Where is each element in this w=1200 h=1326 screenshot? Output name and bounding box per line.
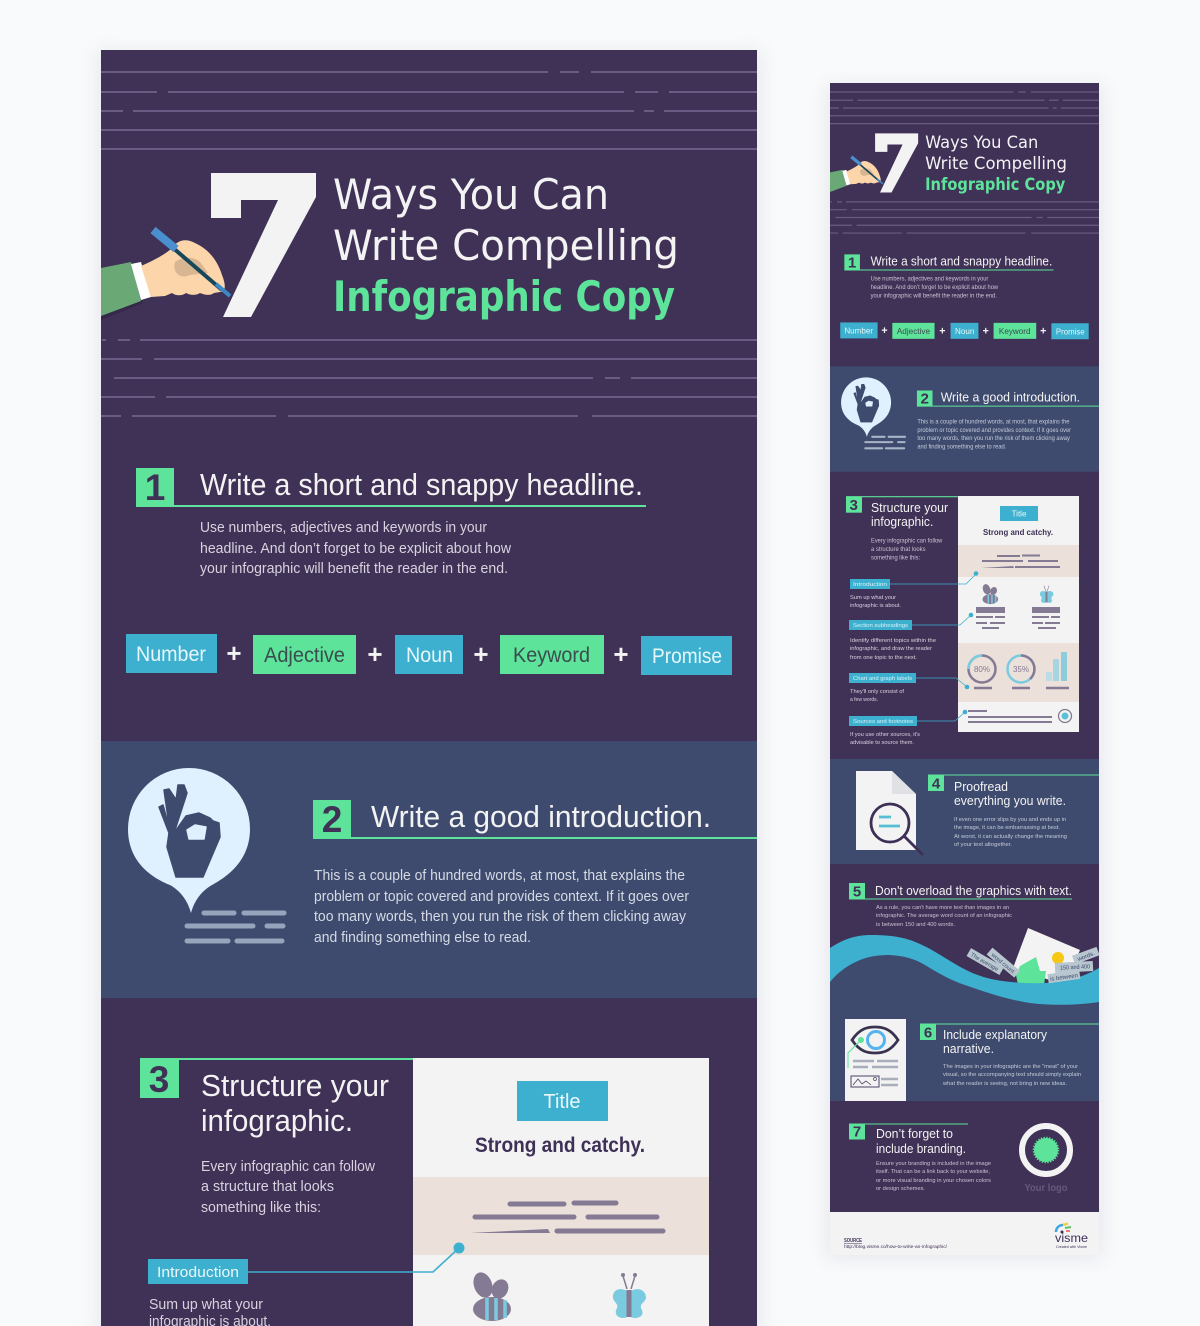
thumbnail panel: section 4 proofread: At worst, it can actually change the meaning <box>954 834 1067 840</box>
thumbnail panel: section 6: visual, so the accompanying text should simply explain <box>943 1072 1081 1078</box>
thumbnail callouts: Section subheadings <box>853 623 908 629</box>
section 2 text: problem or topic covered and provides context. If it goes over <box>314 888 689 905</box>
headline formula <box>126 634 732 675</box>
thumbnail panel: section 6: what the reader is seeing, not bring in new ideas. <box>942 1081 1067 1087</box>
thumbnail panel: section 6: 6 <box>924 1024 932 1042</box>
section 3 heading: 3 <box>149 1059 169 1100</box>
section 3 heading <box>140 1059 413 1138</box>
thumbnail section 3 heading: something like this: <box>871 554 920 561</box>
thumbnail section 2: 2 <box>920 391 929 408</box>
thumbnail section 5 heading: 5 <box>853 884 861 900</box>
thumbnail callouts: infographic is about. <box>850 603 901 609</box>
thumbnail formula: + <box>1040 325 1046 337</box>
section 1 text: your infographic will benefit the reader in the end. <box>200 560 508 577</box>
section 3 heading: infographic. <box>201 1103 353 1138</box>
thumbnail callouts: If you use other sources, it's <box>850 732 920 738</box>
thumbnail callouts: Introduction <box>853 582 887 588</box>
thumbnail icon: hand <box>830 157 883 192</box>
introduction description: Sum up what your <box>149 1296 263 1313</box>
thumbnail section 2: Write a good introduction. <box>941 390 1080 405</box>
thumbnail callouts: They'll only consist of <box>850 689 904 695</box>
thumbnail callouts: a few words. <box>850 697 878 703</box>
thumbnail section 2: problem or topic covered and provides context. If it goes over <box>917 427 1071 434</box>
thumbnail formula: Keyword <box>999 326 1031 336</box>
thumbnail callouts: infographic, and draw the reader <box>850 646 932 652</box>
section 2 heading: 2 <box>322 799 342 840</box>
thumbnail panel: section 7: or more visual branding in your chosen colors <box>876 1178 991 1184</box>
thumbnail panel: section 7: Don’t forget to <box>876 1127 953 1141</box>
headline formula: Noun <box>406 644 453 667</box>
thumbnail formula: Noun <box>955 326 975 336</box>
icon: eye card <box>845 1019 906 1101</box>
source: SOURCE <box>844 1238 863 1244</box>
thumbnail callouts: from one topic to the next. <box>850 655 917 661</box>
thumbnail panel: section 4 proofread: 4 <box>932 776 941 792</box>
thumbnail icons: bee and butterfly <box>981 583 1053 604</box>
thumbnail formula: Adjective <box>897 326 930 336</box>
headline formula: Number <box>136 643 206 666</box>
thumbnail formula: + <box>983 325 989 337</box>
thumbnail callouts <box>849 571 978 746</box>
section 2 heading: Write a good introduction. <box>371 799 711 834</box>
thumbnail section 1: Use numbers, adjectives and keywords in your <box>871 276 988 283</box>
callout: introduction <box>148 1242 464 1284</box>
thumbnail callouts: Sources and footnotes <box>853 719 913 725</box>
thumbnail title: Write Compelling <box>925 154 1067 174</box>
section 2 text: This is a couple of hundred words, at most, that explains the <box>314 867 685 884</box>
thumbnail panel: section 7 <box>830 1101 1099 1212</box>
thumbnail panel: section 6: narrative. <box>943 1042 994 1056</box>
introduction description <box>149 1296 271 1326</box>
thumbnail section 2 <box>830 366 1099 472</box>
thumbnail callouts: Chart and graph labels <box>853 676 912 682</box>
icon: OK hand speech bubble <box>128 768 284 941</box>
thumbnail panel: section 7: Ensure your branding is included in the image <box>876 1161 991 1167</box>
callout: introduction: Introduction <box>157 1264 239 1281</box>
thumbnail section 3 heading: infographic. <box>871 514 933 529</box>
panel: full infographic thumbnail <box>830 83 1100 1255</box>
headline formula: + <box>613 639 629 669</box>
thumbnail: top half scaled <box>830 92 1099 561</box>
thumbnail panel: section 7: 7 <box>853 1124 861 1140</box>
thumbnail chart: 35% donut: 35% <box>1013 665 1029 674</box>
thumbnail panel: section 4 proofread: everything you write. <box>954 794 1066 808</box>
thumbnail chart: 35% donut <box>1008 656 1034 682</box>
icon: bee <box>470 1270 511 1321</box>
illustration: image and words sliding into wave: word count <box>989 952 1015 975</box>
section 3 text: something like this: <box>201 1199 321 1216</box>
thumbnail chart: 80% donut <box>968 656 996 682</box>
thumbnail section 2: This is a couple of hundred words, at most, that explains the <box>917 418 1070 425</box>
thumbnail formula <box>840 322 1089 339</box>
panel: infographic structure mockup <box>413 1058 709 1326</box>
thumbnail section 3 heading: Structure your <box>871 500 949 515</box>
thumbnail panel: section 4 proofread: of your text altogether. <box>954 842 1012 848</box>
thumbnail panel: section 4 proofread <box>830 759 1099 864</box>
section 3 text: Every infographic can follow <box>201 1158 375 1175</box>
thumbnail footer logo ring <box>1058 710 1072 722</box>
illustration: image and words sliding into wave: words. <box>1076 951 1096 963</box>
thumbnail section 5 heading: As a rule, you can't have more text than images in an <box>876 905 1009 911</box>
panel: large infographic preview <box>101 50 757 1326</box>
visme logo: Created with Visme <box>1056 1245 1087 1249</box>
section 1 text <box>200 519 511 577</box>
thumbnail section 2: and finding something else to read. <box>917 444 1007 451</box>
thumbnail section 5 heading: infographic. The average word count of an infographic <box>876 913 1012 919</box>
icon: your logo: Your logo <box>1024 1182 1068 1194</box>
headline formula: + <box>367 639 383 669</box>
thumbnail structure mockup: Title <box>1012 510 1027 518</box>
thumbnail formula: + <box>881 325 888 337</box>
thumbnail panel: section 6 <box>845 1019 1099 1101</box>
section 1 text: headline. And don’t forget to be explicit about how <box>200 540 511 557</box>
thumbnail panel: section 4 proofread: the image, it can be embarrassing at best. <box>954 825 1060 831</box>
thumbnail icon: seven <box>875 133 918 192</box>
icon: document with magnifier <box>856 771 922 854</box>
thumbnail section 3 heading: Every infographic can follow <box>871 538 943 545</box>
headline formula: Promise <box>652 645 722 668</box>
section 2 text: too many words, then you run the risk of them clicking away <box>314 908 686 925</box>
icon: big number seven <box>211 173 316 317</box>
thumbnail callouts: advisable to source them. <box>850 740 914 746</box>
title: Write Compelling <box>333 221 679 270</box>
thumbnail section 5 heading <box>849 883 1072 928</box>
thumbnail section 2: too many words, then you run the risk of them clicking away <box>917 435 1071 442</box>
headline formula: + <box>226 638 242 668</box>
section 3 text: a structure that looks <box>201 1178 334 1195</box>
icon: hand writing with pen <box>101 230 230 320</box>
thumbnail section 1: your infographic will benefit the reader in the end. <box>871 292 997 299</box>
headline formula: Adjective <box>264 644 345 667</box>
thumbnail panel: section 4 proofread: Proofread <box>954 780 1008 794</box>
thumbnail chart: bars <box>1046 652 1067 681</box>
mockup headline: Strong and catchy. <box>475 1134 645 1157</box>
headline formula: + <box>473 639 489 669</box>
section 1 text: Use numbers, adjectives and keywords in your <box>200 519 487 536</box>
thumbnail section 5 heading: is between 150 and 400 words. <box>876 922 955 928</box>
thumbnail panel: section 7: include branding. <box>876 1142 966 1156</box>
thumbnail section 3 heading: a structure that looks <box>871 546 926 553</box>
thumbnail panel: section 7: itself. That can be a link back to your website, <box>876 1169 990 1175</box>
thumbnail section 1 <box>844 253 1053 299</box>
thumbnail section 1: Write a short and snappy headline. <box>871 253 1052 268</box>
headline formula: Keyword <box>513 644 590 667</box>
section 2 text: and finding something else to read. <box>314 929 531 946</box>
icon: butterfly <box>613 1273 646 1318</box>
thumbnail panel: section 6: The images in your infographic are the "meat" of your <box>943 1064 1078 1070</box>
section 3 heading: Structure your <box>201 1068 389 1103</box>
panel: section 2 band <box>101 741 757 998</box>
thumbnail panel: section 7: or design schemes. <box>876 1186 925 1192</box>
thumbnail structure mockup: Strong and catchy. <box>983 527 1053 537</box>
illustration: image and words sliding into wave <box>830 928 1100 1102</box>
thumbnail formula: Promise <box>1056 326 1085 336</box>
section 1 heading: Write a short and snappy headline. <box>200 467 643 502</box>
title: Infographic Copy <box>333 272 675 321</box>
thumbnail panel: section 4 proofread: If even one error slips by you and ends up in <box>954 817 1066 823</box>
visme logo: visme <box>1055 1231 1088 1245</box>
thumbnail formula: Number <box>844 326 873 336</box>
title <box>333 170 679 321</box>
thumbnail chart: 80% donut: 80% <box>974 665 990 674</box>
section 2 heading <box>313 799 757 840</box>
thumbnail footer <box>830 1212 1099 1255</box>
thumbnail formula: + <box>939 325 945 337</box>
header lines top <box>101 72 757 416</box>
thumbnail section 5 heading: Don't overload the graphics with text. <box>875 884 1072 898</box>
section 2 text <box>314 867 689 946</box>
thumbnail section 3 heading <box>846 497 958 561</box>
section 1 heading: 1 <box>145 467 165 508</box>
title tag <box>517 1081 608 1121</box>
icon: your logo <box>1022 1126 1070 1194</box>
thumbnail title: Infographic Copy <box>925 175 1065 195</box>
thumbnail callouts: Identify different topics within the <box>850 638 936 644</box>
thumbnail section 1: 1 <box>848 255 856 272</box>
thumbnail section 3 heading: 3 <box>850 497 858 514</box>
title tag: Title <box>543 1091 581 1113</box>
thumbnail structure mockup <box>958 496 1079 732</box>
thumbnail footer: http://blog.visme.co/how-to-write-an-infographic/ <box>844 1244 948 1249</box>
thumbnail title: Ways You Can <box>925 133 1038 153</box>
section 3 text <box>201 1158 375 1216</box>
thumbnail panel: section 6: Include explanatory <box>943 1028 1048 1042</box>
illustration: image and words sliding into wave: is between <box>1050 973 1078 983</box>
thumbnail callouts: Sum up what your <box>850 595 896 601</box>
illustration: image and words sliding into wave: The average <box>969 952 999 973</box>
thumbnail title <box>925 133 1067 195</box>
title: Ways You Can <box>333 170 609 219</box>
thumbnail section 1: headline. And don’t forget to be explicit about how <box>871 284 999 291</box>
visme logo <box>1055 1224 1088 1249</box>
illustration: image and words sliding into wave: 150 and 400 <box>1060 964 1090 972</box>
